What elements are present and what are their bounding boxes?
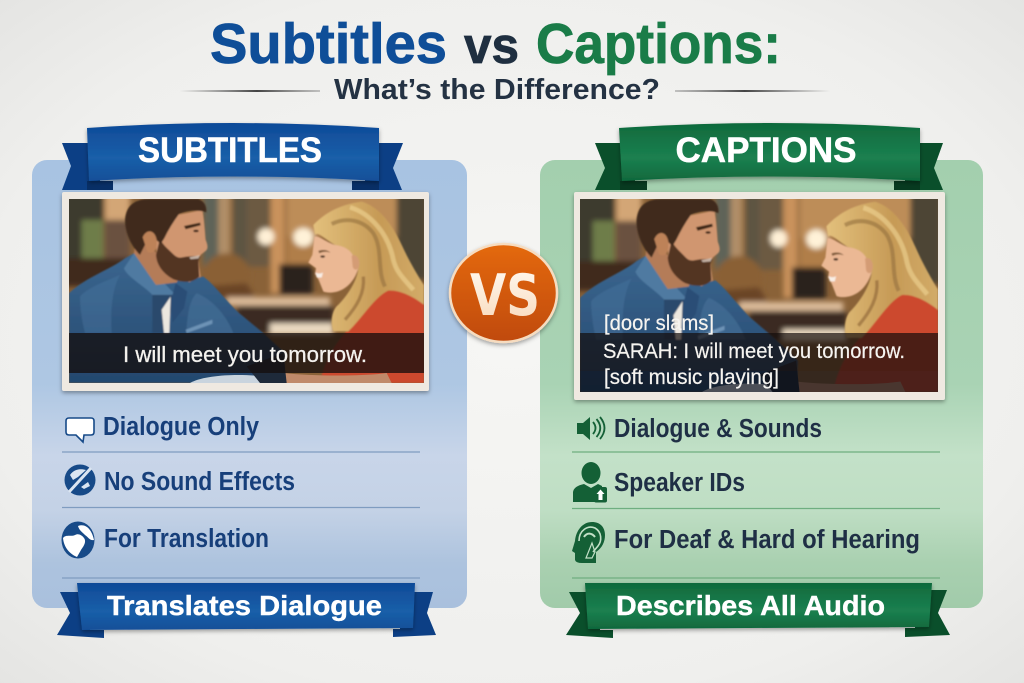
panel background: subtitles: [32, 160, 467, 608]
VS badge: [450, 244, 557, 342]
bottom ribbon: Translates Dialogue: Translates Dialogue: [107, 590, 382, 621]
icon: head with ear: [572, 522, 605, 563]
photo frame: captions example: [door slams]: [604, 312, 714, 335]
list item: For Translation: [62, 522, 269, 558]
top ribbon: captions: CAPTIONS: [676, 131, 856, 170]
icon: crossed circle: [64, 464, 96, 496]
bottom ribbon: Describes All Audio: [566, 583, 950, 638]
photo frame: subtitles example: I will meet you tomorrow.: [123, 342, 367, 367]
title: Subtitles: [210, 12, 447, 76]
photo frame: captions example: [574, 192, 945, 400]
photo frame: subtitles example: [62, 192, 429, 391]
icon: globe: [62, 522, 94, 558]
title: vs: [464, 17, 519, 74]
VS badge: VS: [470, 263, 540, 329]
panel: subtitles: [32, 123, 467, 638]
title: [210, 12, 781, 76]
list item: No Sound Effects: No Sound Effects: [104, 468, 295, 496]
top ribbon: captions: [595, 123, 943, 190]
photo frame: captions example: SARAH: I will meet you tomorrow.: [603, 340, 905, 363]
list item: No Sound Effects: [64, 464, 295, 496]
bottom ribbon: Translates Dialogue: [57, 583, 436, 638]
panel: captions: [540, 123, 983, 638]
title: Captions:: [536, 12, 781, 76]
list item: Speaker IDs: [573, 462, 745, 502]
bottom ribbon: Describes All Audio: Describes All Audio: [616, 590, 885, 621]
photo frame: captions example: [soft music playing]: [604, 366, 779, 389]
list item: For Translation: For Translation: [104, 525, 269, 553]
icon: speech bubble: [66, 418, 94, 442]
panel background: captions: [540, 160, 983, 608]
list item: For Deaf & Hard of Hearing: For Deaf & Hard of Hearing: [614, 526, 920, 554]
icon: speaker person: [573, 462, 607, 502]
list item: Dialogue & Sounds: Dialogue & Sounds: [614, 415, 822, 443]
top ribbon: subtitles: SUBTITLES: [138, 131, 322, 170]
top ribbon: subtitles: [62, 123, 403, 190]
icon: speaker: [577, 417, 604, 440]
list item: Speaker IDs: Speaker IDs: [614, 469, 745, 497]
list item: For Deaf & Hard of Hearing: [572, 522, 920, 563]
subtitle heading: What’s the Difference?: [334, 74, 660, 106]
list item: Dialogue Only: Dialogue Only: [103, 413, 260, 441]
